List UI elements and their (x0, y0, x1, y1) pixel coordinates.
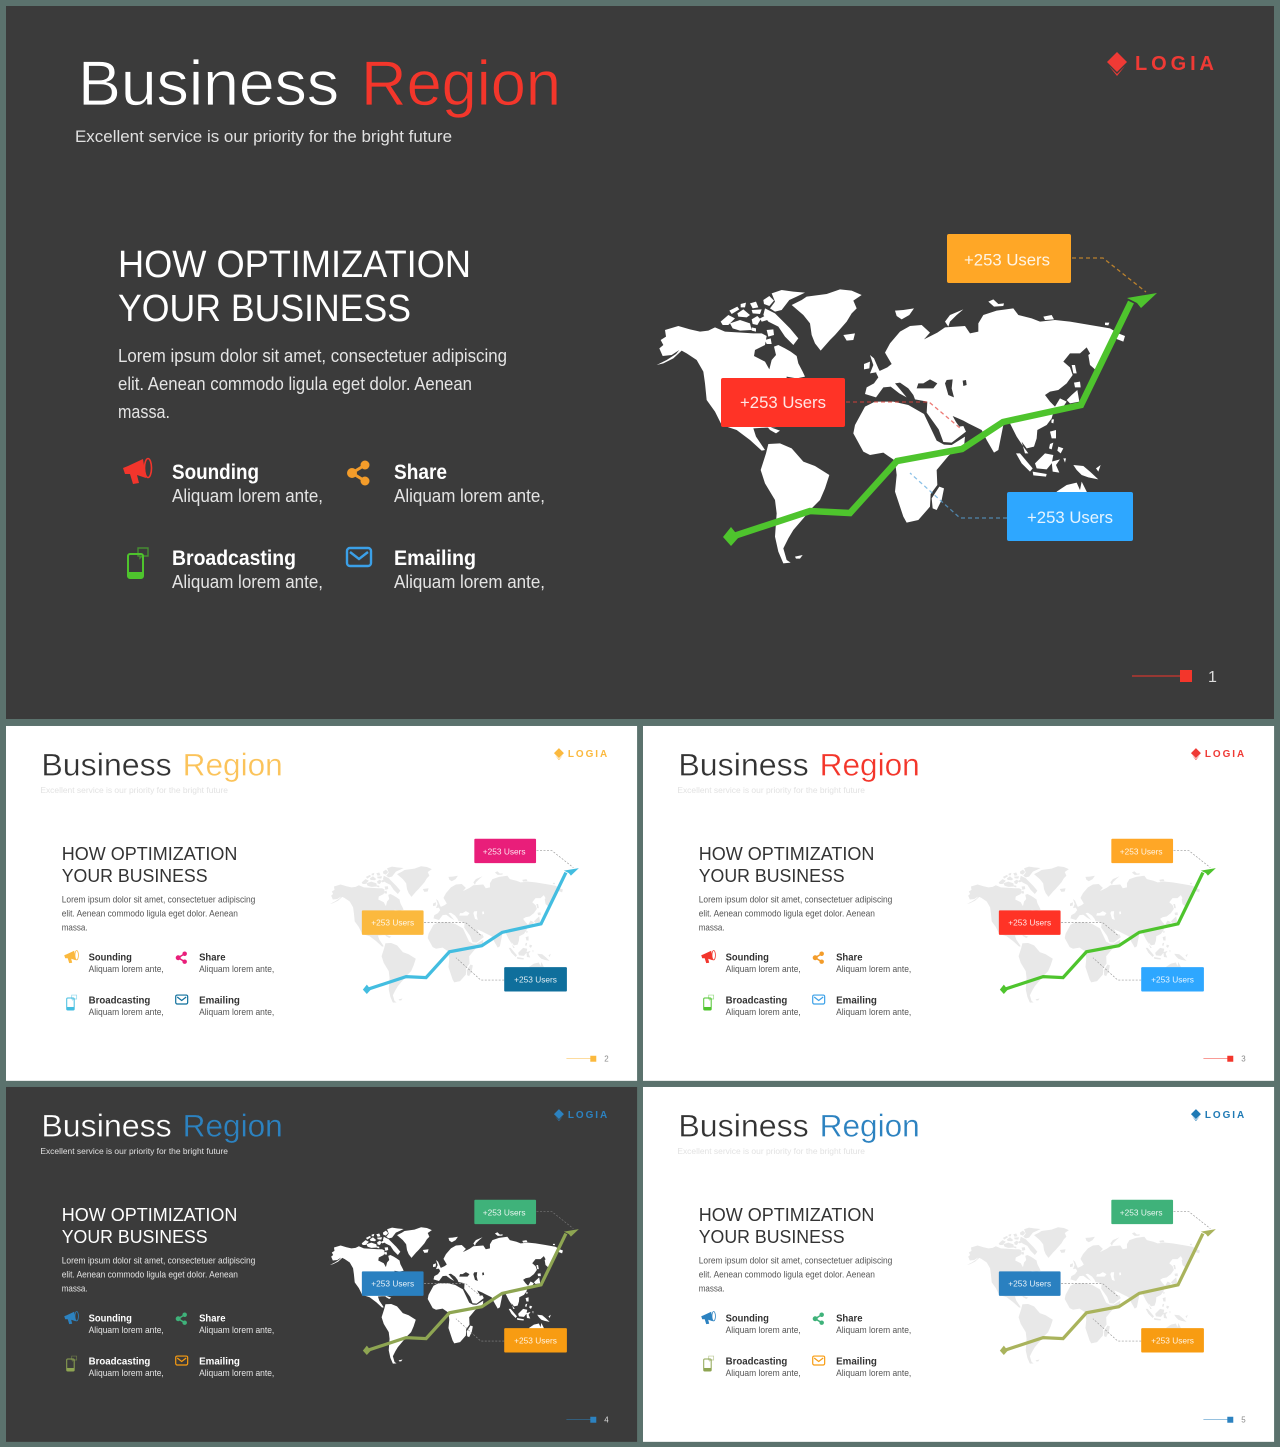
slide 1: large dark Business Region slide (6, 6, 1274, 719)
callout: orange +253 Users (1111, 839, 1173, 863)
subtitle: Excellent service is our priority for the bright future (40, 1146, 228, 1156)
feature: Share: Aliquam lorem ante, (199, 1325, 274, 1335)
title: Region (361, 49, 561, 119)
connector: pink callout to arrow tip (537, 851, 573, 868)
feature: Emailing (813, 995, 911, 1017)
body text: elit. Aenean commodo ligula eget dolor. Aenean (699, 908, 875, 918)
feature: Broadcasting: Aliquam lorem ante, (89, 1368, 164, 1378)
feature: Share (176, 951, 274, 974)
title: Business (78, 49, 339, 119)
callout: yellow +253 Users (362, 910, 424, 935)
feature: Broadcasting: Aliquam lorem ante, (172, 572, 323, 592)
callout: blue +253 Users: +253 Users (1027, 508, 1113, 527)
slide background (643, 726, 1274, 1081)
title: Region (820, 747, 920, 782)
feature: Broadcasting (704, 1356, 801, 1378)
feature: Emailing: Emailing (199, 1357, 240, 1368)
callout: green +253 Users (474, 1200, 536, 1224)
title (678, 1108, 920, 1143)
feature: Emailing (176, 1356, 274, 1378)
growth line with arrow (723, 293, 1157, 546)
body text: massa. (699, 922, 725, 932)
feature: Share: Share (836, 1314, 863, 1325)
connector: orange callout to Africa (456, 1319, 504, 1341)
feature: Broadcasting: Broadcasting (726, 1357, 787, 1368)
heading: YOUR BUSINESS (699, 866, 845, 887)
page number (1203, 1416, 1246, 1425)
callout: green +253 Users: +253 Users (483, 1207, 526, 1217)
slide background (6, 726, 637, 1081)
heading: HOW OPTIMIZATION (699, 844, 874, 865)
callout: blue +253 Users (999, 1271, 1061, 1296)
logo: LOGIA (1205, 749, 1244, 760)
feature: Broadcasting (128, 547, 323, 592)
connector: blue callout to Africa (456, 958, 504, 980)
body text: elit. Aenean commodo ligula eget dolor. Aenean (118, 374, 472, 394)
logo: LOGIA (1205, 1110, 1244, 1121)
callout: red +253 Users (721, 378, 845, 427)
heading (699, 844, 874, 887)
feature: Emailing (813, 1356, 911, 1378)
body text: Lorem ipsum dolor sit amet, consectetuer adipiscing (62, 894, 255, 904)
world map (657, 289, 1125, 563)
title: Business (41, 747, 172, 782)
growth line with arrow (363, 1229, 579, 1355)
title: Business (41, 1108, 172, 1143)
heading (118, 244, 471, 330)
body text: massa. (118, 402, 170, 422)
subtitle: Excellent service is our priority for the bright future (677, 1146, 865, 1156)
feature: Share: Aliquam lorem ante, (199, 964, 274, 974)
title: Business (678, 1108, 809, 1143)
feature: Broadcasting (67, 1356, 164, 1378)
feature: Emailing (347, 547, 545, 592)
feature: Share: Share (836, 953, 863, 964)
body text (699, 1255, 892, 1293)
title (78, 49, 561, 119)
callout: deep blue +253 Users: +253 Users (514, 975, 557, 985)
feature: Share: Aliquam lorem ante, (836, 964, 911, 974)
connector: orange callout to arrow tip (1174, 851, 1210, 868)
body text (118, 346, 507, 422)
callout: deep blue +253 Users (504, 967, 567, 992)
feature: Broadcasting: Aliquam lorem ante, (726, 1007, 801, 1017)
feature: Share (813, 951, 911, 974)
feature: Sounding (701, 950, 801, 974)
connector: green callout to arrow tip (537, 1212, 573, 1229)
heading: YOUR BUSINESS (699, 1227, 845, 1248)
feature: Broadcasting: Aliquam lorem ante, (726, 1368, 801, 1378)
slide 3: white slide with red accent (643, 726, 1274, 1081)
feature: Sounding: Sounding (726, 953, 769, 964)
connector: blue callout to Africa (1093, 958, 1141, 980)
heading: HOW OPTIMIZATION (699, 1205, 874, 1226)
feature: Sounding: Aliquam lorem ante, (89, 964, 164, 974)
heading: HOW OPTIMIZATION (62, 844, 237, 865)
heading (62, 844, 237, 887)
connector: red callout to Middle East (846, 402, 960, 428)
feature: Sounding (123, 458, 323, 506)
callout: green +253 Users: +253 Users (1120, 1207, 1163, 1217)
callout: green +253 Users (1111, 1200, 1173, 1224)
heading (62, 1205, 237, 1248)
subtitle: Excellent service is our priority for the bright future (75, 127, 452, 146)
growth line with arrow (1000, 868, 1216, 994)
feature: Sounding: Sounding (726, 1314, 769, 1325)
feature: Sounding (701, 1311, 801, 1335)
feature: Broadcasting: Broadcasting (172, 547, 296, 570)
body text: massa. (699, 1283, 725, 1293)
feature: Share: Share (199, 953, 226, 964)
body text: elit. Aenean commodo ligula eget dolor. Aenean (62, 908, 238, 918)
logo (554, 1109, 607, 1121)
callout: orange +253 Users (504, 1328, 567, 1353)
world map (967, 866, 1200, 1003)
callout: orange +253 Users (947, 234, 1071, 283)
callout: blue +253 Users (1141, 967, 1204, 992)
title: Region (183, 1108, 283, 1143)
page number: 3 (1241, 1055, 1246, 1064)
callout: blue +253 Users: +253 Users (1151, 975, 1194, 985)
world map (330, 866, 563, 1003)
body text: Lorem ipsum dolor sit amet, consectetuer adipiscing (118, 346, 507, 366)
feature: Broadcasting: Broadcasting (89, 996, 150, 1007)
feature: Emailing: Aliquam lorem ante, (836, 1007, 911, 1017)
page number (1132, 669, 1217, 686)
feature: Sounding (64, 1311, 164, 1335)
feature: Emailing: Emailing (836, 996, 877, 1007)
feature: Share: Share (199, 1314, 226, 1325)
page number: 2 (604, 1055, 609, 1064)
feature: Emailing: Aliquam lorem ante, (394, 572, 545, 592)
connector: green callout to arrow tip (1174, 1212, 1210, 1229)
feature: Emailing: Emailing (199, 996, 240, 1007)
callout: orange +253 Users: +253 Users (514, 1336, 557, 1346)
heading: YOUR BUSINESS (62, 866, 208, 887)
feature: Sounding: Aliquam lorem ante, (726, 1325, 801, 1335)
heading (699, 1205, 874, 1248)
feature: Share: Share (394, 461, 447, 484)
title (678, 747, 920, 782)
subtitle: Excellent service is our priority for the bright future (40, 785, 228, 795)
feature: Share: Aliquam lorem ante, (836, 1325, 911, 1335)
heading: HOW OPTIMIZATION (62, 1205, 237, 1226)
callout: red +253 Users (999, 910, 1061, 935)
feature: Share: Aliquam lorem ante, (394, 486, 545, 506)
callout: orange +253 Users: +253 Users (964, 250, 1050, 270)
body text: Lorem ipsum dolor sit amet, consectetuer adipiscing (699, 894, 892, 904)
connector: red callout to Middle East (1061, 922, 1118, 935)
world map (330, 1227, 563, 1364)
connector: yellow callout to Middle East (424, 922, 481, 935)
feature: Sounding: Sounding (89, 953, 132, 964)
feature: Emailing: Aliquam lorem ante, (199, 1007, 274, 1017)
feature: Broadcasting: Broadcasting (89, 1357, 150, 1368)
slide 4: dark slide with blue accent (6, 1087, 637, 1442)
feature: Sounding: Aliquam lorem ante, (89, 1325, 164, 1335)
page number (566, 1055, 609, 1064)
callout: red +253 Users: +253 Users (740, 393, 826, 412)
body text: elit. Aenean commodo ligula eget dolor. Aenean (62, 1269, 238, 1279)
body text (699, 894, 892, 932)
title (41, 747, 283, 782)
feature: Broadcasting (67, 995, 164, 1017)
title: Region (820, 1108, 920, 1143)
body text: elit. Aenean commodo ligula eget dolor. Aenean (699, 1269, 875, 1279)
connector: blue callout to Africa (910, 473, 1007, 518)
body text: massa. (62, 1283, 88, 1293)
body text (62, 894, 255, 932)
growth line with arrow (1000, 1229, 1216, 1355)
page number (566, 1416, 609, 1425)
logo (1191, 748, 1244, 760)
callout: red +253 Users: +253 Users (1008, 917, 1051, 927)
body text (62, 1255, 255, 1293)
feature: Broadcasting (704, 995, 801, 1017)
page number: 4 (604, 1416, 609, 1425)
callout: blue +253 Users (362, 1271, 424, 1296)
body text: massa. (62, 922, 88, 932)
feature: Sounding: Aliquam lorem ante, (726, 964, 801, 974)
feature: Sounding: Sounding (89, 1314, 132, 1325)
logo: LOGIA (1135, 53, 1214, 75)
logo (554, 748, 607, 760)
callout: blue +253 Users: +253 Users (371, 1278, 414, 1288)
page number: 5 (1241, 1416, 1246, 1425)
slide 5: white slide with blue accent (643, 1087, 1274, 1442)
feature: Broadcasting: Aliquam lorem ante, (89, 1007, 164, 1017)
feature: Emailing: Emailing (836, 1357, 877, 1368)
logo: LOGIA (568, 749, 607, 760)
logo (1107, 52, 1214, 76)
slide background (6, 6, 1274, 719)
feature: Sounding: Aliquam lorem ante, (172, 486, 323, 506)
slide 2: white slide with yellow accent (6, 726, 637, 1081)
title: Region (183, 747, 283, 782)
connector: blue callout to Middle East (424, 1283, 481, 1296)
feature: Share (176, 1312, 274, 1335)
callout: yellow +253 Users: +253 Users (371, 917, 414, 927)
body text: Lorem ipsum dolor sit amet, consectetuer adipiscing (699, 1255, 892, 1265)
connector: orange callout to Africa (1093, 1319, 1141, 1341)
callout: pink +253 Users: +253 Users (483, 846, 526, 856)
heading: YOUR BUSINESS (62, 1227, 208, 1248)
callout: blue +253 Users: +253 Users (1008, 1278, 1051, 1288)
feature: Emailing: Aliquam lorem ante, (199, 1368, 274, 1378)
feature: Broadcasting: Broadcasting (726, 996, 787, 1007)
heading: HOW OPTIMIZATION (118, 244, 471, 286)
growth line with arrow (363, 868, 579, 994)
logo (1191, 1109, 1244, 1121)
page number (1203, 1055, 1246, 1064)
body text: Lorem ipsum dolor sit amet, consectetuer adipiscing (62, 1255, 255, 1265)
page number: 1 (1208, 669, 1217, 686)
connector: blue callout to Middle East (1061, 1283, 1118, 1296)
logo: LOGIA (568, 1110, 607, 1121)
connector: orange callout to arrow tip (1072, 258, 1146, 292)
slide background (6, 1087, 637, 1442)
callout: pink +253 Users (474, 839, 536, 863)
slide background (643, 1087, 1274, 1442)
feature: Sounding: Sounding (172, 461, 259, 484)
subtitle: Excellent service is our priority for the bright future (677, 785, 865, 795)
feature: Emailing: Aliquam lorem ante, (836, 1368, 911, 1378)
feature: Emailing: Emailing (394, 547, 476, 570)
callout: blue +253 Users (1007, 492, 1133, 541)
title (41, 1108, 283, 1143)
feature: Share (813, 1312, 911, 1335)
callout: orange +253 Users (1141, 1328, 1204, 1353)
world map (967, 1227, 1200, 1364)
title: Business (678, 747, 809, 782)
feature: Emailing (176, 995, 274, 1017)
feature: Share (347, 460, 545, 506)
callout: orange +253 Users: +253 Users (1151, 1336, 1194, 1346)
heading: YOUR BUSINESS (118, 288, 411, 330)
feature: Sounding (64, 950, 164, 974)
callout: orange +253 Users: +253 Users (1120, 846, 1163, 856)
